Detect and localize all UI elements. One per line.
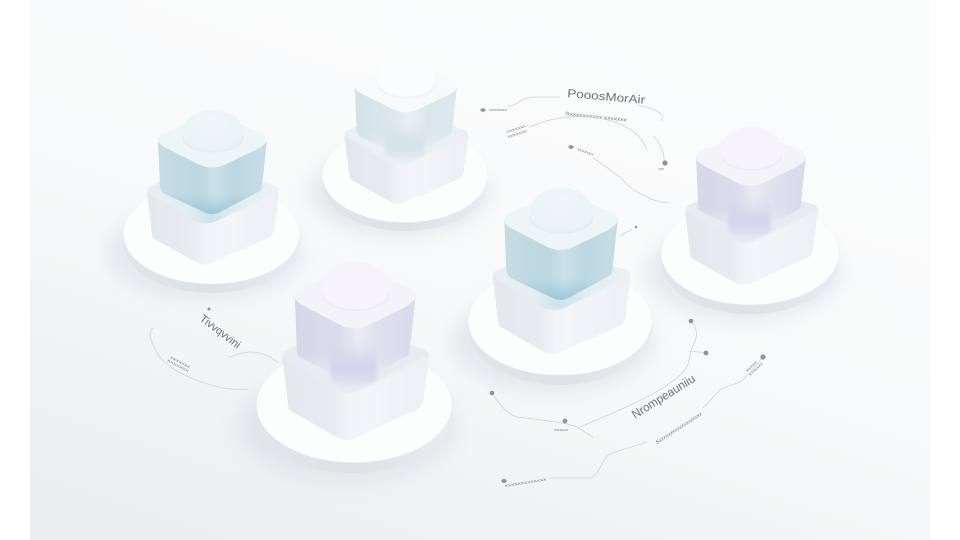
small labels: xxx: [658, 166, 664, 171]
annotation group: bottom right: [490, 319, 766, 488]
annotation group: left: [150, 308, 278, 389]
dome: [322, 262, 389, 311]
connector lines: [150, 328, 278, 389]
small labels: xxxxx: [744, 360, 758, 373]
lower block: [147, 182, 279, 264]
small labels: [489, 107, 664, 171]
dome: [182, 110, 244, 152]
small labels: xxxxxxx: [507, 128, 527, 139]
upper block: [355, 71, 457, 161]
upper block: [504, 203, 618, 300]
dome: [378, 58, 435, 98]
marker dot: [208, 308, 210, 310]
small labels: xxxxxxx: [747, 361, 764, 377]
disc base: [661, 203, 838, 314]
small labels: [504, 360, 764, 488]
lower block: [493, 266, 630, 354]
small labels: xxxxxxx: [506, 123, 526, 134]
disc base: [322, 128, 488, 231]
marker dots: [480, 108, 668, 228]
upper block: [295, 278, 416, 388]
title: PooosMorAir: PooosMorAir: [567, 88, 646, 107]
block unit: blue left: [107, 110, 303, 300]
marker dots: [490, 319, 766, 483]
block unit: pale top: [307, 58, 491, 238]
block unit: lavender front: [238, 262, 455, 481]
disc base: [124, 184, 300, 293]
subtitle: Sxxxxxxxxxx xxxxxxx: [565, 111, 628, 124]
connector lines: [492, 321, 763, 478]
subtitle: Sxxxxxxxxxxxxxxxxxxx: [655, 411, 704, 446]
title: Tivvqvvini: Tivvqvvini: [197, 313, 243, 351]
small labels: xxxxxxxxxxxxx: [504, 476, 547, 488]
block unit: blue centre: [451, 188, 655, 392]
upper block: [696, 141, 806, 238]
annotation group: top right: [480, 88, 670, 236]
upper block: [158, 124, 267, 214]
dome: [530, 188, 593, 234]
small labels: xxxxxxx: [170, 355, 191, 369]
small labels: xxxxxxx: [577, 146, 594, 157]
connector lines: [508, 97, 670, 236]
small labels: xxxxx: [554, 427, 568, 432]
lower block: [283, 345, 429, 440]
small labels: [167, 355, 191, 373]
lower block: [344, 126, 468, 204]
lower block: [685, 201, 818, 285]
dome: [721, 127, 782, 170]
disc base: [257, 347, 451, 473]
title: Nrompeauniiu: Nrompeauniiu: [629, 372, 698, 422]
small labels: xxxxxxx: [167, 358, 190, 373]
disc base: [468, 268, 651, 385]
small labels: xxxxxxx: [489, 107, 507, 112]
block unit: lavender right: [645, 127, 842, 321]
